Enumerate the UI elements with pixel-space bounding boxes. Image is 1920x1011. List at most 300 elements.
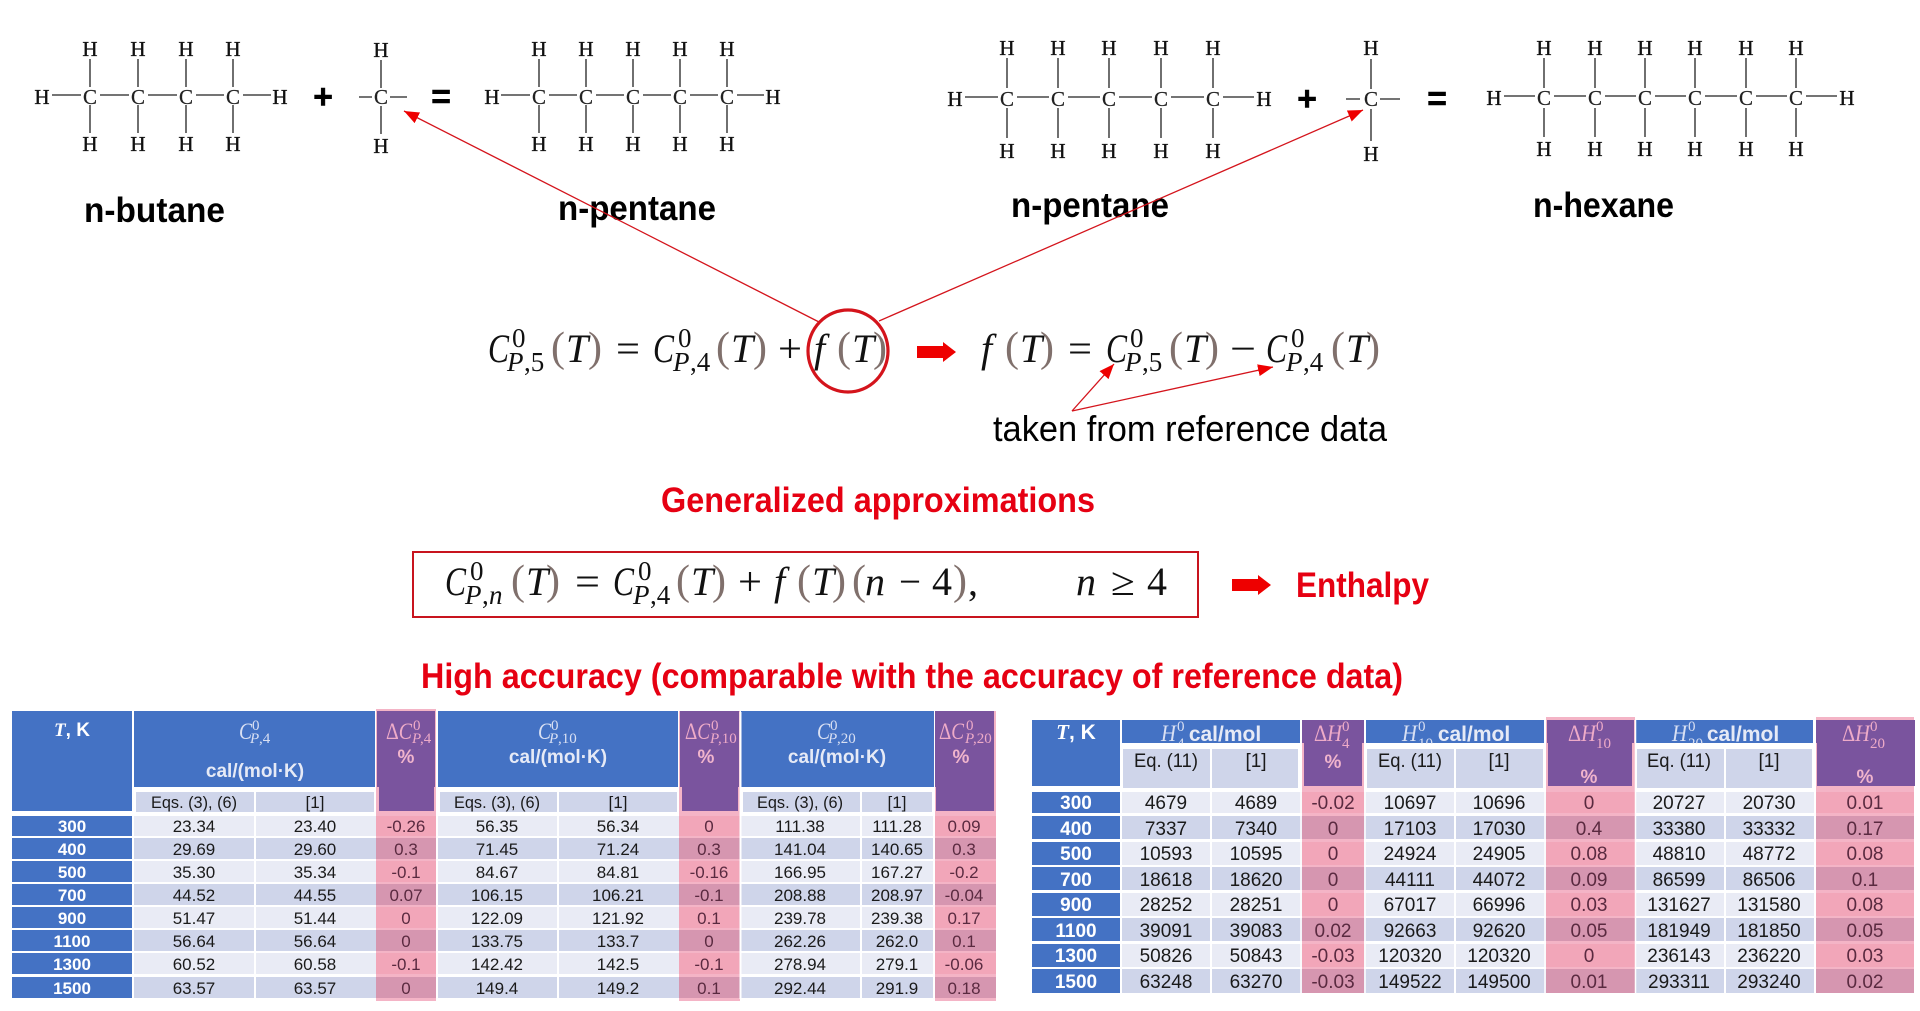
row: 500 K: 35.30 [173, 863, 215, 882]
molecule: n-pentane structure left: H [531, 37, 547, 61]
row: 700 K: 208.88 [774, 886, 826, 905]
molecule: n-pentane structure right: H [1205, 139, 1221, 163]
row: 400 K: 7337 [1145, 819, 1187, 840]
molecule: n-butane structure: H [272, 85, 288, 109]
molecule: n-pentane structure right: H [1153, 139, 1169, 163]
row: 900 K [1032, 893, 1914, 916]
molecule: n-butane structure: C [131, 85, 145, 109]
molecule: n-pentane structure left: C [579, 85, 593, 109]
arrow: f(T) to left CH2 group [404, 111, 819, 322]
row: 500 K: 35.34 [294, 863, 336, 882]
molecule: n-hexane structure: H [1587, 36, 1603, 60]
table header: heat capacity columns: 0 [966, 718, 974, 734]
row: 1300 K: 236143 [1647, 946, 1711, 967]
row: 700 K: 44.52 [173, 886, 215, 905]
equation: f(T) as difference: ( [1169, 325, 1183, 371]
row: 1300 K: -0.06 [945, 955, 983, 974]
molecule: n-pentane structure right: H [1101, 36, 1117, 60]
table header: heat capacity columns: ,10 [558, 731, 577, 747]
table header: heat capacity columns: Eqs. (3), (6) [757, 793, 843, 812]
equation: f(T) as difference: T [1184, 326, 1209, 371]
row: 1100 K: 1100 [1055, 921, 1097, 942]
molecule: n-hexane structure: H [1587, 137, 1603, 161]
molecule: n-hexane structure: H [1486, 86, 1502, 110]
table header: heat capacity columns: ,10 [718, 731, 737, 747]
table header: enthalpy columns: H [1671, 721, 1688, 746]
row: 300 K: 20727 [1653, 793, 1705, 814]
table header: heat capacity columns: % [698, 747, 715, 768]
row: 1100 K: 181949 [1647, 921, 1711, 942]
row: 1500 K: 292.44 [774, 979, 826, 998]
boxed general equation: ( [852, 558, 866, 604]
row: 300 K: 300 [1060, 793, 1092, 814]
table header: enthalpy columns: % [1325, 752, 1342, 773]
molecule: n-hexane structure: H [1536, 36, 1552, 60]
row: 500 K: 0 [1328, 844, 1338, 865]
row: 900 K: 28251 [1230, 895, 1282, 916]
row: 1100 K: 133.75 [471, 932, 523, 951]
table header: enthalpy columns: 10, [1418, 736, 1437, 752]
label: n-pentane right: n-pentane [1011, 186, 1169, 225]
heading: high accuracy: High accuracy (comparable with the accuracy of reference data) [421, 657, 1403, 696]
row: 500 K: 48772 [1743, 844, 1795, 865]
row: 1300 K [12, 953, 996, 974]
molecule: n-hexane structure: C [1789, 86, 1803, 110]
equation: heat capacity of pentane from butane: ,4 [690, 347, 711, 377]
row: 1300 K [1032, 944, 1914, 967]
row: 1100 K: 0.1 [952, 932, 976, 951]
table header: heat capacity columns: P [709, 731, 719, 747]
row: 300 K [1032, 792, 1914, 814]
row: 400 K: 29.69 [173, 840, 215, 859]
label: enthalpy: Enthalpy [1296, 566, 1429, 605]
molecule: n-butane structure: H [82, 132, 98, 156]
boxed general equation: n [865, 559, 885, 604]
row: 1500 K: 1500 [53, 979, 91, 998]
boxed general equation: ) [546, 558, 560, 604]
row: 1100 K: 262.26 [774, 932, 826, 951]
molecule: CH2 group left: C [374, 85, 388, 109]
row: 700 K: 106.15 [471, 886, 523, 905]
table: enthalpy [1032, 717, 1915, 994]
row: 700 K: 0.1 [1852, 870, 1878, 891]
molecule: n-hexane structure: H [1839, 86, 1855, 110]
molecule: n-butane structure: H [225, 132, 241, 156]
row: 700 K: 44.55 [294, 886, 336, 905]
row: 700 K: 700 [1060, 870, 1092, 891]
equation: heat capacity of pentane from butane: ( [551, 325, 565, 371]
boxed general equation: ) [712, 558, 726, 604]
row: 1500 K: 0.1 [697, 979, 721, 998]
table header: enthalpy columns: 20 [1870, 736, 1885, 752]
row: 700 K [1032, 867, 1914, 891]
row: 700 K: 18620 [1230, 870, 1282, 891]
row: 700 K: 0 [1328, 870, 1338, 891]
equation: f(T) as difference: 0 [1130, 323, 1144, 353]
boxed general equation: , [482, 580, 489, 610]
label: n-pentane left: n-pentane [558, 189, 716, 228]
molecule: n-butane structure: H [130, 37, 146, 61]
table header: heat capacity columns: P [964, 731, 974, 747]
table header: heat capacity columns: P [827, 731, 837, 747]
molecule: n-hexane structure: C [1638, 86, 1652, 110]
molecule: n-pentane structure left: C [720, 85, 734, 109]
molecule: CH2 group right: H [1363, 36, 1379, 60]
molecule: CH2 group right: C [1364, 87, 1378, 111]
boxed general equation: T [691, 559, 716, 604]
molecule: n-pentane structure right: H [999, 139, 1015, 163]
molecule: CH2 group right: H [1363, 142, 1379, 166]
row: 300 K: 56.34 [597, 817, 639, 836]
row: 900 K: 900 [1060, 895, 1092, 916]
row: 300 K: 111.28 [872, 817, 922, 836]
table header: enthalpy columns: Eq. (11) [1134, 751, 1198, 772]
row: 700 K: -0.04 [945, 886, 983, 905]
molecule: n-butane structure: H [178, 37, 194, 61]
equation: f(T) as difference: ( [1005, 325, 1019, 371]
table header: heat capacity columns: Eqs. (3), (6) [454, 793, 540, 812]
row: 1100 K: 0.02 [1315, 921, 1351, 942]
row: 1500 K: 149500 [1467, 972, 1531, 993]
molecule: n-butane structure: H [34, 85, 50, 109]
boxed general equation: ( [511, 558, 525, 604]
boxed general equation: 4 [932, 559, 952, 604]
row: 400 K: 17103 [1384, 819, 1436, 840]
molecule: n-pentane structure left: H [625, 132, 641, 156]
equation: heat capacity of pentane from butane: ) [588, 325, 602, 371]
table header: enthalpy columns: 0 [1870, 719, 1878, 735]
equation: f(T) as difference: = [1068, 326, 1092, 371]
row: 400 K: 33332 [1743, 819, 1795, 840]
row: 900 K: 67017 [1384, 895, 1436, 916]
molecule: n-pentane structure right: C [1051, 87, 1065, 111]
table header: enthalpy columns: H [1401, 721, 1418, 746]
table header: heat capacity columns: 0 [413, 718, 420, 734]
row: 1100 K: 39091 [1140, 921, 1192, 942]
equation: heat capacity of pentane from butane: ,5 [524, 347, 544, 377]
equation: heat capacity of pentane from butane: T [566, 326, 591, 371]
row: 1300 K: -0.1 [391, 955, 421, 974]
table header: enthalpy columns: [1] [1488, 751, 1510, 772]
row: 400 K [1032, 816, 1914, 840]
molecule: n-pentane structure right: H [1153, 36, 1169, 60]
equals sign: = [431, 78, 451, 116]
row: 1500 K: 0.18 [947, 979, 981, 998]
row: 400 K: 71.24 [597, 840, 639, 859]
row: 1500 K: 0.02 [1847, 972, 1883, 993]
molecule: n-hexane structure: H [1738, 137, 1754, 161]
molecule: n-butane structure: H [82, 37, 98, 61]
row: 500 K [1032, 842, 1914, 865]
molecule: n-butane structure: C [179, 85, 193, 109]
row: 500 K: 10593 [1140, 844, 1192, 865]
row: 500 K: 48810 [1653, 844, 1705, 865]
row: 1300 K: 60.52 [173, 955, 215, 974]
row: 500 K: 500 [1060, 844, 1092, 865]
row: 1300 K: 278.94 [774, 955, 826, 974]
equation: f(T) as difference: ,5 [1142, 347, 1162, 377]
boxed general equation: P [632, 580, 650, 610]
row: 1100 K [1032, 918, 1914, 942]
molecule: n-pentane structure right: H [947, 87, 963, 111]
boxed general equation: ( [797, 558, 811, 604]
table header: enthalpy columns: cal/mol [1189, 723, 1261, 746]
equation: f(T) as difference: C [1106, 326, 1128, 371]
row: 1500 K [12, 977, 996, 998]
molecule: n-hexane structure: C [1739, 86, 1753, 110]
row: 1500 K: 63.57 [294, 979, 336, 998]
red circle around f(T) [808, 310, 888, 392]
table header: heat capacity columns: C [239, 719, 253, 744]
table header: enthalpy columns: Eq. (11) [1378, 751, 1442, 772]
equation: f(T) as difference: ,4 [1303, 347, 1324, 377]
row: 400 K: 141.04 [774, 840, 826, 859]
row: 300 K [12, 816, 996, 836]
note: taken from reference data: taken from reference data [993, 408, 1388, 449]
molecule: n-hexane structure: H [1687, 137, 1703, 161]
row: 1100 K: 92620 [1473, 921, 1525, 942]
table header: enthalpy columns: ΔH [1842, 721, 1871, 746]
row: 900 K: 900 [58, 909, 86, 928]
row: 1100 K: 56.64 [173, 932, 215, 951]
equation: f(T) as difference: C [1266, 326, 1288, 371]
block arrow: to enthalpy [1232, 575, 1271, 595]
table header: heat capacity columns: ΔC [939, 719, 965, 744]
equation: heat capacity of pentane from butane: ( [716, 325, 730, 371]
row: 1300 K: 1300 [1055, 946, 1097, 967]
table header: heat capacity columns: ,4 [259, 731, 271, 747]
row: 1300 K: 0.03 [1847, 946, 1883, 967]
row: 300 K: 23.40 [294, 817, 336, 836]
row: 500 K: 0.08 [1571, 844, 1607, 865]
molecule: n-pentane structure left: C [673, 85, 687, 109]
table header: enthalpy columns: cal/mol [1438, 723, 1510, 746]
table header: enthalpy columns [1032, 717, 1915, 993]
boxed general equation: f [774, 559, 790, 604]
molecule: n-pentane structure left: C [626, 85, 640, 109]
row: 900 K [12, 907, 996, 928]
equation: heat capacity of pentane from butane: ) [753, 325, 767, 371]
row: 1300 K: -0.1 [694, 955, 724, 974]
table header: enthalpy columns: 0 [1418, 719, 1426, 735]
row: 300 K: 23.34 [173, 817, 215, 836]
equation: heat capacity of pentane from butane [488, 323, 887, 377]
molecule: n-butane structure: H [130, 132, 146, 156]
boxed general equation: T [812, 559, 837, 604]
row: 1300 K: -0.03 [1311, 946, 1355, 967]
molecule: n-hexane structure: H [1687, 36, 1703, 60]
table header: heat capacity columns: 0 [551, 718, 558, 734]
row: 1300 K: 236220 [1737, 946, 1801, 967]
row: 400 K: 33380 [1653, 819, 1705, 840]
boxed general equation: ) [953, 558, 967, 604]
molecule: n-pentane structure right: H [1050, 36, 1066, 60]
table header: heat capacity columns: [1] [888, 793, 906, 812]
row: 1500 K: 63270 [1230, 972, 1282, 993]
boxed general equation: C [445, 559, 467, 604]
table header: enthalpy columns: ΔH [1568, 721, 1597, 746]
row: 1100 K: 262.0 [876, 932, 918, 951]
row: 1100 K: 1100 [54, 932, 90, 951]
row: 400 K: 71.45 [476, 840, 518, 859]
row: 1100 K: 92663 [1384, 921, 1436, 942]
row: 1500 K: 149.2 [597, 979, 639, 998]
boxed general equation: n [489, 580, 502, 610]
equation: heat capacity of pentane from butane: P [506, 347, 524, 377]
molecule: n-hexane structure: C [1688, 86, 1702, 110]
row: 300 K: 0 [1584, 793, 1594, 814]
equation: f(T) as difference: T [1020, 326, 1045, 371]
molecule: n-pentane structure right: C [1102, 87, 1116, 111]
row: 700 K: 44111 [1385, 870, 1435, 891]
row: 500 K: 167.27 [871, 863, 923, 882]
equation: f(T) as difference: f [981, 326, 997, 371]
equation: heat capacity of pentane from butane: f [814, 326, 830, 371]
row: 500 K: 24905 [1473, 844, 1525, 865]
equation: heat capacity of pentane from butane: 0 [678, 323, 692, 353]
table header: enthalpy columns: 0 [1342, 719, 1350, 735]
row: 1500 K: 149522 [1378, 972, 1442, 993]
table header: enthalpy columns: % [1581, 767, 1598, 788]
molecule: n-pentane structure right: C [1000, 87, 1014, 111]
row: 1500 K [1032, 969, 1914, 993]
boxed general equation: ≥ [1111, 559, 1135, 604]
row: 1300 K: 50826 [1140, 946, 1192, 967]
table header: heat capacity columns: ΔC [386, 719, 413, 744]
equation: heat capacity of pentane from butane: C [653, 326, 675, 371]
equation: heat capacity of pentane from butane: T [731, 326, 756, 371]
boxed general equation: T [526, 559, 551, 604]
row: 700 K: 86599 [1653, 870, 1705, 891]
table header: enthalpy columns: cal/mol [1707, 723, 1779, 746]
molecule: n-pentane structure right: H [1256, 87, 1272, 111]
row: 900 K: 51.44 [294, 909, 336, 928]
molecule: n-pentane structure left: H [484, 85, 500, 109]
row: 400 K: 400 [1060, 819, 1092, 840]
table header: enthalpy columns: 0 [1177, 719, 1184, 735]
molecule: CH2 group left: H [373, 134, 389, 158]
row: 1500 K: 149.4 [476, 979, 518, 998]
row: 1100 K [12, 930, 996, 951]
row: 700 K: 0.09 [1571, 870, 1607, 891]
table header: heat capacity columns: T, K [54, 720, 90, 741]
block arrow: implies [917, 342, 956, 362]
row: 300 K: -0.26 [387, 817, 425, 836]
molecule: n-pentane structure left: H [765, 85, 781, 109]
boxed general equation: = [575, 559, 600, 604]
molecule: n-pentane structure right: H [999, 36, 1015, 60]
row: 300 K: -0.02 [1311, 793, 1355, 814]
equation: f(T) as difference: P [1124, 347, 1142, 377]
molecule: n-pentane structure right: H [1050, 139, 1066, 163]
table header: heat capacity columns: cal/(mol·K) [788, 747, 886, 768]
arrow: reference note to first heat capacity [1072, 364, 1114, 411]
row: 500 K: -0.2 [949, 863, 979, 882]
row: 400 K: 29.60 [294, 840, 336, 859]
boxed general equation: 4 [1147, 559, 1167, 604]
row: 400 K: 0.3 [394, 840, 418, 859]
table header: enthalpy columns: 4, [1177, 736, 1188, 752]
equation: heat capacity of pentane from butane: T [852, 326, 877, 371]
row: 400 K [12, 838, 996, 859]
row: 1500 K: 291.9 [876, 979, 918, 998]
row: 400 K: 17030 [1473, 819, 1525, 840]
molecule: n-pentane structure left: H [625, 37, 641, 61]
table header: enthalpy columns: H [1160, 721, 1177, 746]
row: 900 K: 0 [1328, 895, 1338, 916]
row: 300 K: 0 [704, 817, 714, 836]
boxed general equation: P [464, 580, 482, 610]
equals sign right: = [1427, 80, 1447, 118]
row: 1300 K: 50843 [1230, 946, 1282, 967]
molecule: CH2 group left: H [373, 38, 389, 62]
row: 500 K: 84.81 [597, 863, 639, 882]
row: 1500 K: 0.01 [1571, 972, 1607, 993]
molecule: n-butane structure: C [83, 85, 97, 109]
row: 500 K: -0.16 [690, 863, 728, 882]
table header: heat capacity columns: C [817, 719, 831, 744]
equation: f(T) as difference: ) [1040, 325, 1054, 371]
row: 400 K: 0.4 [1576, 819, 1603, 840]
row: 300 K: 10696 [1473, 793, 1525, 814]
equation: f(T) as difference: ) [1205, 325, 1219, 371]
molecule: n-pentane structure left: H [719, 37, 735, 61]
row: 300 K: 300 [58, 817, 86, 836]
equation: f(T) as difference: ( [1331, 325, 1345, 371]
molecule: n-pentane structure left: H [719, 132, 735, 156]
row: 1500 K: -0.03 [1311, 972, 1355, 993]
row: 500 K: 24924 [1384, 844, 1437, 865]
row: 1100 K: 133.7 [597, 932, 639, 951]
boxed general equation: ,4 [650, 580, 671, 610]
row: 300 K: 10697 [1384, 793, 1436, 814]
row: 500 K: 10595 [1230, 844, 1282, 865]
row: 900 K: 131627 [1647, 895, 1711, 916]
molecule: n-hexane structure: H [1536, 137, 1552, 161]
row: 300 K: 4689 [1235, 793, 1277, 814]
row: 900 K: 121.92 [592, 909, 644, 928]
boxed general equation [413, 552, 1198, 617]
molecule: n-butane structure: H [225, 37, 241, 61]
row: 700 K: 18618 [1140, 870, 1192, 891]
row: 500 K [12, 861, 996, 882]
boxed general equation: , [968, 559, 978, 604]
row: 300 K: 4679 [1145, 793, 1187, 814]
molecule: n-butane structure [34, 37, 288, 156]
row: 700 K: 208.97 [871, 886, 923, 905]
molecule: CH2 group left [359, 38, 407, 158]
boxed general equation: C [613, 559, 635, 604]
label: n-butane: n-butane [84, 191, 225, 230]
row: 1500 K: 63248 [1140, 972, 1192, 993]
molecule: n-hexane structure [1486, 36, 1855, 161]
table header: heat capacity columns: Eqs. (3), (6) [151, 793, 237, 812]
table header: heat capacity columns: [1] [306, 793, 324, 812]
row: 1300 K: 120320 [1378, 946, 1442, 967]
row: 1100 K: 181850 [1737, 921, 1801, 942]
table header: enthalpy columns: 20, [1688, 736, 1707, 752]
molecule: n-pentane structure left: C [532, 85, 546, 109]
molecule: n-hexane structure: C [1588, 86, 1602, 110]
boxed general equation: 0 [470, 556, 484, 586]
row: 400 K: 0.17 [1847, 819, 1883, 840]
table header: enthalpy columns: T, K [1056, 720, 1096, 744]
equation: f(T) as difference: 0 [1291, 323, 1304, 353]
equation: heat capacity of pentane from butane: ( [837, 325, 851, 371]
row: 400 K: 0.3 [952, 840, 976, 859]
row: 1300 K: 60.58 [294, 955, 336, 974]
heading: generalized approximations: Generalized approximations [661, 481, 1095, 520]
